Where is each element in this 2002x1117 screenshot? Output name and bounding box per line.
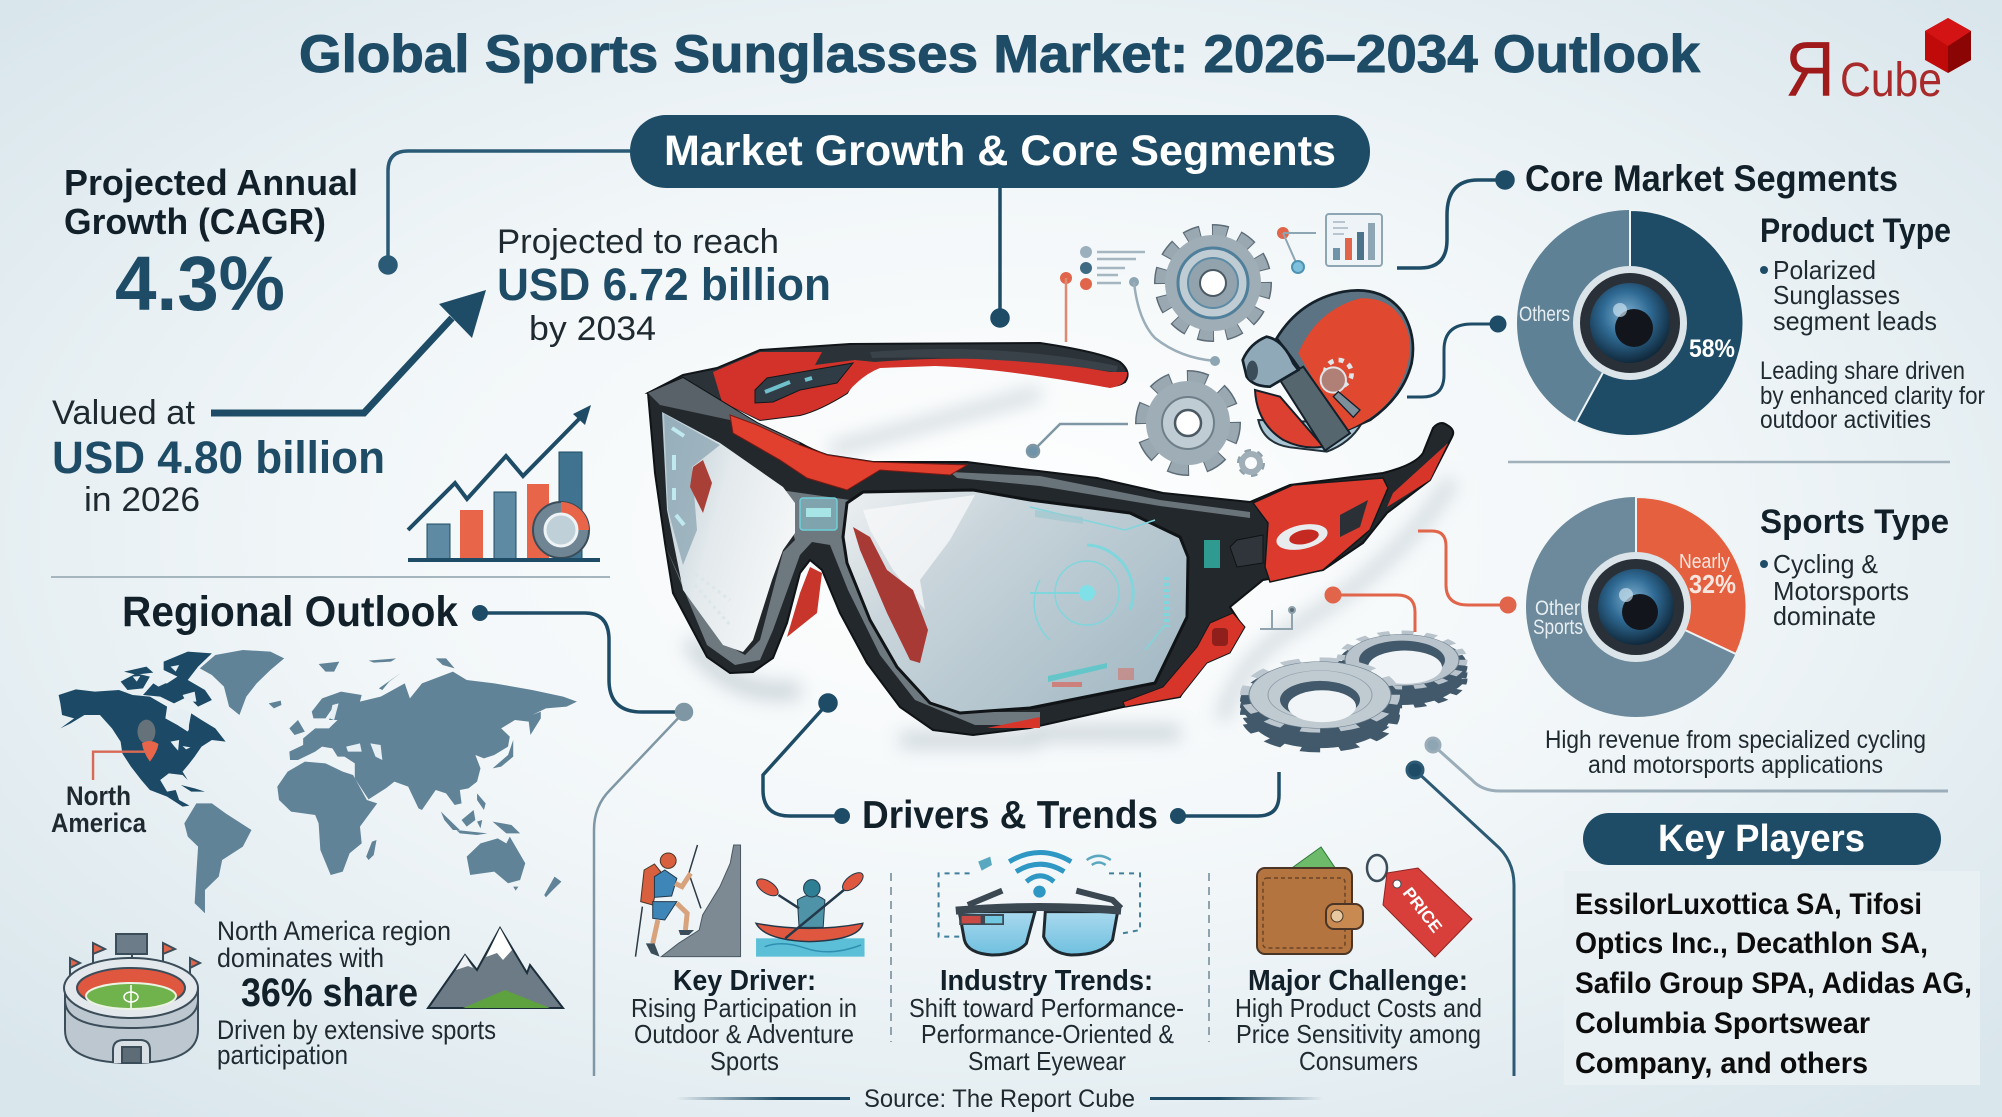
connector: red to sports type (1418, 531, 1515, 612)
chart: product type pie: 58% (1689, 335, 1735, 363)
icon: tiny gear (1240, 452, 1262, 474)
icon: wallet and price tag (1257, 847, 1472, 957)
north america pin (93, 720, 158, 780)
connector: left column rule (594, 704, 692, 1076)
text block: product type: outdoor activities (1760, 406, 1931, 434)
text block: projected value: Projected to reach (497, 223, 779, 261)
text block: CAGR: 4.3% (115, 241, 285, 327)
connector: product pie (1407, 317, 1505, 397)
chart: product type pie (1517, 210, 1743, 436)
back nose pad (787, 567, 822, 637)
text block: product type (1760, 212, 1985, 434)
connector: pill to CAGR (380, 151, 630, 273)
glasses shadows (690, 393, 1452, 740)
left lens HUD band (664, 414, 720, 565)
logo: RCube (1785, 18, 1971, 113)
icon: tiny connector glyph (1260, 607, 1295, 629)
text block: key driver (631, 965, 857, 1076)
text block: CAGR: Growth (CAGR) (64, 201, 326, 242)
connector: core segments (1397, 172, 1513, 268)
left lens (662, 412, 795, 652)
pill: key players (1583, 813, 1941, 865)
heading: core market segments: Core Market Segments (1525, 158, 1898, 199)
text block: major challenge: Price Sensitivity among (1236, 1019, 1481, 1049)
source line (676, 1085, 1323, 1113)
panel: key players list: Columbia Sportswear (1575, 1007, 1870, 1040)
text block: high revenue: High revenue from specialized cycling (1545, 726, 1926, 754)
text block: key driver: Rising Participation in (631, 993, 857, 1023)
text block: north america share (217, 916, 496, 1070)
connector: pill to glasses (992, 188, 1008, 326)
text block: major challenge: Consumers (1299, 1046, 1418, 1076)
text block: current value: USD 4.80 billion (52, 432, 385, 483)
text block: major challenge (1235, 965, 1482, 1076)
red brow band (730, 415, 967, 490)
right lens (843, 490, 1188, 713)
text block: major challenge: Major Challenge: (1248, 965, 1468, 997)
bridge hud (800, 498, 837, 530)
lower red pod and trim (1123, 613, 1245, 707)
text block: key driver: Sports (710, 1046, 779, 1076)
section pill: market growth and core segments: Market Growth & Core Segments (664, 127, 1336, 175)
far temple arm (648, 343, 1128, 420)
text block: product type: Leading share driven (1760, 357, 1965, 385)
chart: sports type pie: 32% (1689, 569, 1736, 599)
text block: sports type: dominate (1773, 601, 1876, 631)
panel: key players list: Safilo Group SPA, Adidas AG, (1575, 967, 1972, 1000)
connector: drivers left (763, 695, 842, 816)
title: Global Sports Sunglasses Market: 2026–2034 Outlook (299, 25, 1701, 84)
icon: bottom gears (1247, 633, 1461, 749)
heading: drivers and trends: Drivers & Trends (862, 794, 1158, 837)
icon: mountain (428, 928, 563, 1008)
lakes and bays (133, 665, 196, 751)
text block: high revenue (1545, 726, 1926, 779)
logo: RCube: Cube (1840, 54, 1942, 107)
icon: growth bar chart (408, 405, 600, 560)
chart: sports type pie: Sports (1533, 616, 1583, 639)
hero: sports sunglasses (648, 343, 1453, 735)
pill: key players: Key Players (1658, 818, 1865, 860)
text block: projected value: by 2034 (529, 310, 656, 348)
text block: projected value: USD 6.72 billion (497, 259, 831, 310)
text block: sports type: Sports Type (1760, 503, 1949, 541)
left nose pad (690, 460, 712, 513)
icon: small chart (1326, 214, 1382, 266)
text block: high revenue: and motorsports applications (1588, 751, 1883, 779)
text block: product type: Polarized (1773, 255, 1876, 285)
label: north america: America (51, 808, 147, 838)
connector: drivers right (1178, 772, 1279, 816)
icon: smart eyewear with wifi (939, 852, 1140, 955)
text block: sports type: Cycling & (1773, 549, 1878, 579)
small data icons above glasses (1060, 227, 1316, 366)
text block: product type: Product Type (1760, 212, 1951, 250)
text block: north america share: North America region (217, 916, 451, 946)
icon: medium gear (1143, 378, 1233, 468)
text block: north america share: Driven by extensive sports (217, 1015, 496, 1045)
text block: product type: Sunglasses (1773, 280, 1900, 310)
text block: current value: in 2026 (84, 481, 200, 519)
icon: large gear (1162, 232, 1264, 334)
hud (1030, 507, 1167, 650)
text block: industry trends: Smart Eyewear (968, 1046, 1126, 1076)
chart: sports type pie: Nearly (1679, 551, 1730, 573)
rest of world (184, 650, 577, 913)
frame (648, 378, 1453, 735)
temple tip (1387, 443, 1448, 507)
text block: CAGR (64, 162, 358, 327)
logo: RCube: Я (1785, 25, 1835, 113)
panel: key players list: Company, and others (1575, 1047, 1868, 1080)
heading: regional outlook: Regional Outlook (122, 588, 458, 636)
icon: wallet and price tag: PRICE (1399, 884, 1446, 936)
text block: major challenge: High Product Costs and (1235, 993, 1482, 1023)
text block: north america share: dominates with (217, 943, 384, 973)
text block: sports type: Motorsports (1773, 576, 1909, 606)
icon: climber and kayak (635, 845, 866, 957)
section pill: market growth and core segments (630, 115, 1370, 188)
text block: current value: Valued at (52, 394, 196, 432)
connector: regional outlook to glasses (480, 613, 684, 712)
north america (highlighted) (59, 652, 226, 807)
connector: red to gears (1326, 588, 1415, 632)
panel: key players list: EssilorLuxottica SA, Tifosi (1575, 888, 1922, 921)
text block: north america share: 36% share (241, 971, 418, 1015)
inland seas (330, 703, 382, 760)
arrow: growth (211, 290, 486, 413)
connector: segments bottom rule (1426, 738, 1948, 791)
right lens highlight (863, 495, 975, 610)
label: north america: North (66, 781, 131, 811)
text block: key driver: Outdoor & Adventure (634, 1019, 854, 1049)
right nose pad (853, 527, 928, 663)
world map (59, 650, 577, 913)
panel: key players list (1564, 871, 1980, 1085)
chart: sports type pie: Other (1535, 597, 1580, 620)
frame gray band (665, 490, 1040, 725)
icon: stadium (64, 934, 200, 1063)
text block: product type: segment leads (1773, 306, 1937, 336)
text block: industry trends: Industry Trends: (940, 965, 1153, 997)
text block: industry trends: Performance-Oriented & (921, 1019, 1174, 1049)
text block: sports type (1760, 503, 1949, 631)
text block: key driver: Key Driver: (673, 965, 816, 997)
chart: sports type pie (1526, 497, 1747, 717)
connector: medium gear (1027, 424, 1128, 457)
chart: product type pie: Others (1519, 303, 1570, 326)
text block: north america share: participation (217, 1040, 348, 1070)
text block: CAGR: Projected Annual (64, 162, 358, 203)
hinge (1253, 478, 1388, 582)
label: north america (51, 781, 147, 838)
panel: key players list: Optics Inc., Decathlon SA, (1575, 927, 1928, 960)
text block: industry trends: Shift toward Performance- (909, 993, 1184, 1023)
connector: right column rule (1407, 762, 1514, 1076)
icon: helmet (1243, 290, 1413, 452)
text block: projected value (497, 223, 831, 348)
source line: Source: The Report Cube (864, 1085, 1135, 1113)
text block: current value (52, 394, 385, 519)
text block: industry trends (909, 965, 1184, 1076)
